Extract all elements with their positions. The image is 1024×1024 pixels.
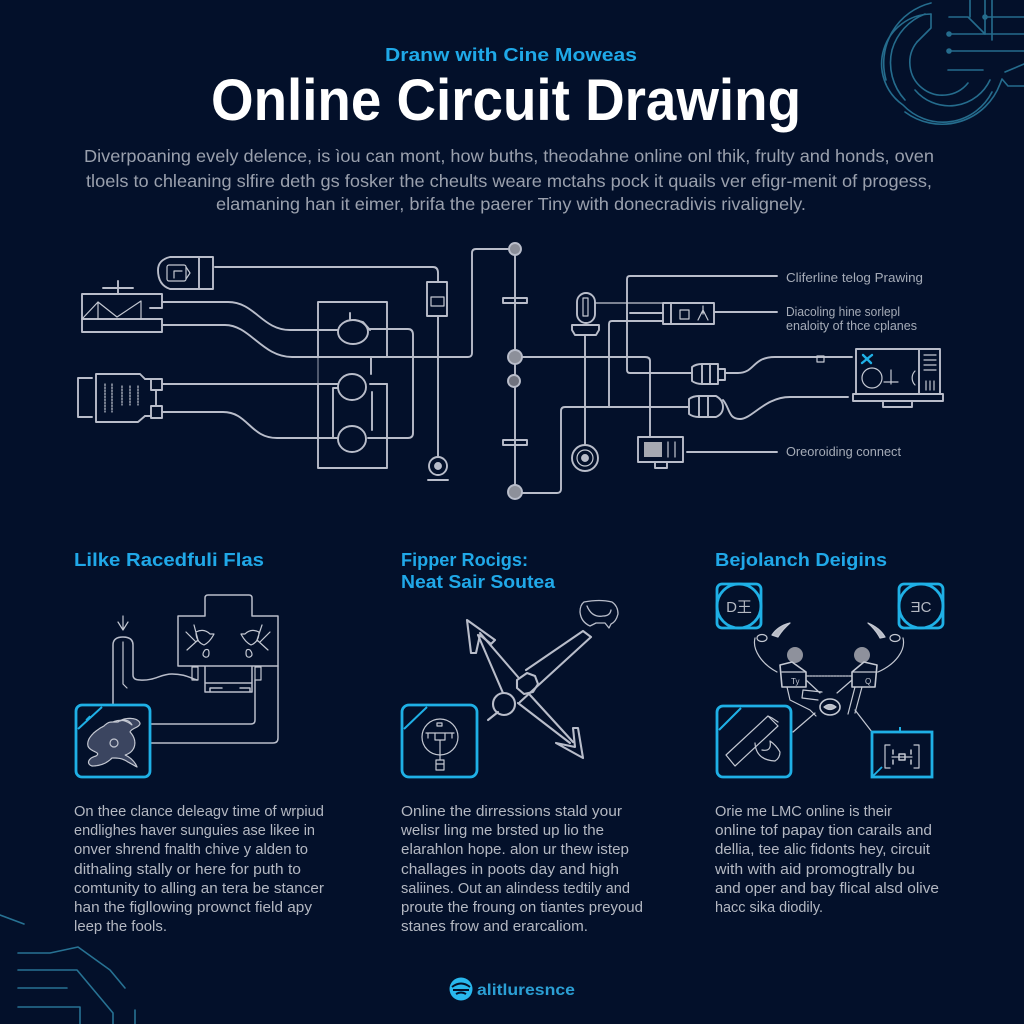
body text: leep the fools.	[74, 919, 167, 935]
icon: bracket diagram in cyan frame	[872, 727, 932, 777]
intro paragraph	[84, 146, 934, 214]
two people connected illustration	[754, 623, 904, 732]
body text: comtunity to alling an tera be stancer	[74, 881, 324, 897]
icon: blob in cyan frame	[76, 705, 150, 777]
intro paragraph: tloels to chleaning slfire deth gs fosker the cheults weare mctahs pock it quails ver efigr-menit of progess,	[86, 171, 932, 191]
body text: challages in poots day and high	[401, 862, 619, 878]
body text: elarahlon hope. alon ur thew istep	[401, 842, 629, 858]
icon: logo mark	[450, 978, 472, 1000]
diagram label: bottom: Oreoroiding connect	[786, 445, 902, 459]
diagram label: top: Cliferline telog Prawing	[786, 271, 923, 285]
circuit board illustration	[113, 595, 278, 743]
heading: Neat Sair Soutea	[401, 572, 556, 592]
icon: circular badge left: D王	[726, 599, 752, 616]
body text	[714, 804, 939, 916]
connectors with curved leads	[689, 356, 852, 419]
microchip component	[78, 374, 168, 422]
intro paragraph: Diverpoaning evely delence, is ìou can mont, how buths, theodahne online onl thik, frulty and honds, oven	[84, 146, 934, 166]
subtitle: Dranw with Cine Moweas	[385, 45, 637, 65]
logic module	[663, 303, 714, 324]
footer logo	[450, 978, 575, 1000]
body text: stanes frow and erarcaliom.	[401, 919, 588, 935]
icon: circular badge right: ƎC	[911, 599, 932, 616]
body text: hacc sika diodily.	[715, 900, 823, 916]
body text: Orie me LMC online is their	[715, 804, 892, 820]
heading: Fipper Rocigs:	[401, 550, 528, 570]
diagram label: middle: enaloity of thce cplanes	[786, 319, 917, 333]
icon: soldering tool in cyan frame	[717, 706, 791, 777]
curved wires from waveform into relay block	[168, 249, 508, 438]
body text: welisr ling me brsted up lio the	[400, 823, 604, 839]
diagram label: middle	[786, 305, 917, 333]
heading	[401, 550, 556, 592]
crossed arrows illustration	[467, 600, 618, 758]
heading: Lilke Racedfuli Flas	[74, 550, 264, 570]
body text: dellia, tee alic fidonts hey, circuit	[715, 842, 930, 858]
right routing wires	[595, 276, 777, 452]
panel: right column	[714, 550, 943, 916]
main circuit diagram	[78, 243, 943, 499]
diagram label: middle: Diacoling hine sorlepl	[786, 305, 900, 319]
bulb probe and target	[572, 293, 599, 471]
monitor	[853, 349, 943, 407]
panel: middle column	[400, 550, 643, 935]
body text: On thee clance deleagv time of wrpiud	[74, 804, 324, 820]
body text	[74, 804, 324, 935]
two people connected illustration: Q	[865, 677, 871, 686]
icon: light bulb in cyan frame	[402, 705, 477, 777]
body text: onver shrend fnalth chive y alden to	[74, 842, 308, 858]
body text: Online the dirressions stald your	[401, 804, 622, 820]
display device component	[158, 257, 213, 289]
icon: circular badge left	[717, 584, 761, 628]
icon: circular badge right	[899, 584, 943, 628]
two people connected illustration: Ty	[791, 677, 799, 686]
body text: proute the froung on tiantes preyoud	[401, 900, 643, 916]
body text	[400, 804, 643, 935]
body text: endlighes haver sunguies ase likee in	[74, 823, 315, 839]
body text: dithaling stally or here for puth to	[74, 862, 301, 878]
body text: and oper and bay flical alsd olive	[715, 881, 939, 897]
intro paragraph: elamaning han it eimer, brifa the paerer Tiny with donecradivis rivalignely.	[216, 194, 806, 214]
waveform generator component	[82, 281, 168, 332]
decoration: bottom left circuit traces	[0, 915, 135, 1024]
title: Online Circuit Drawing	[211, 68, 801, 133]
relay block with three coils	[318, 302, 413, 468]
body text: with with aid promogtrally bu	[714, 862, 915, 878]
panel: left column	[74, 550, 324, 935]
decoration: top right circuit arcs	[882, 0, 1024, 124]
vertical bus with nodes	[503, 243, 689, 499]
fuse module and probe	[427, 282, 448, 480]
brand name: alitlurеsnce	[477, 982, 575, 999]
body text: online tof papay tion carails and	[715, 823, 932, 839]
body text: saliines. Out an alindess tedtily and	[401, 881, 630, 897]
top right wires from display	[215, 267, 438, 282]
body text: han the figllowing prownct field apy	[74, 900, 313, 916]
heading: Bejolanch Deigins	[715, 550, 887, 570]
output box	[638, 437, 683, 468]
